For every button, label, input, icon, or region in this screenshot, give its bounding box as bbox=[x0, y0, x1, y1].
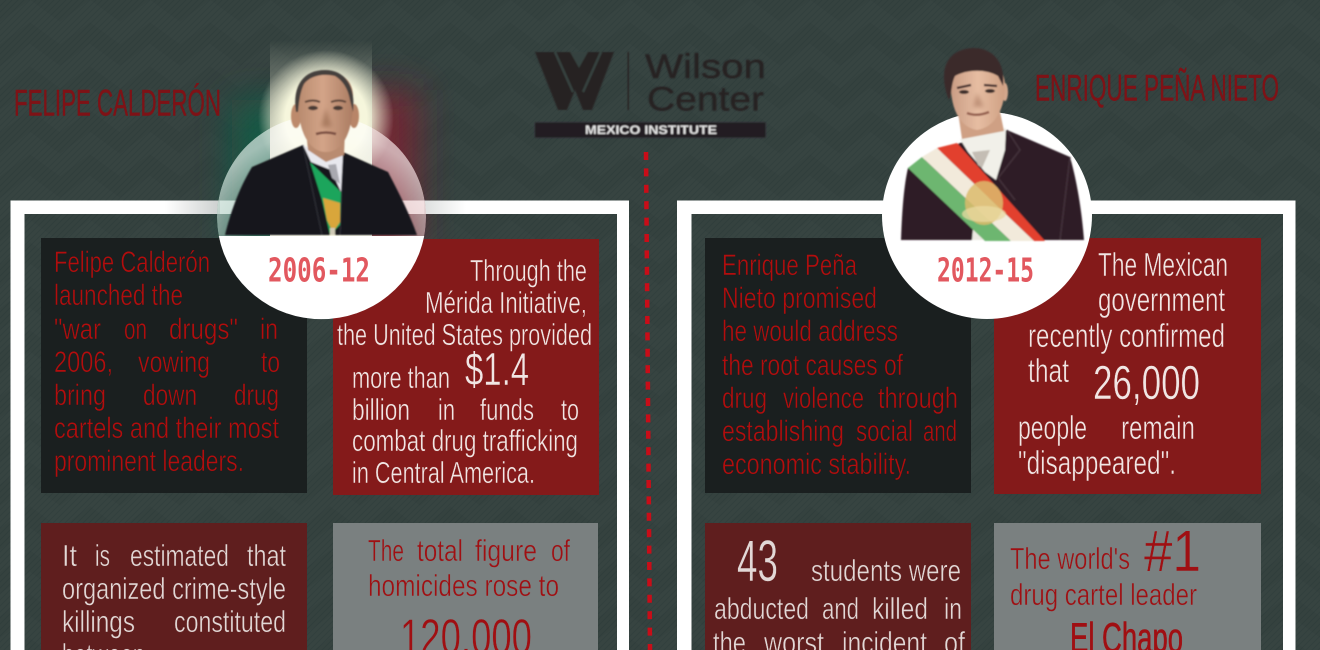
panel: Mérida Initiative: the United States provided bbox=[337, 317, 592, 352]
panel: Mérida Initiative: Through the bbox=[470, 253, 587, 288]
panel: organized crime killings bbox=[41, 523, 307, 650]
logo bar: Mexico Institute: MEXICO INSTITUTE bbox=[585, 123, 717, 137]
portrait: Felipe Calderón bbox=[225, 70, 417, 235]
panel: 43 students: killed bbox=[872, 591, 928, 626]
portrait: Enrique Peña Nieto bbox=[901, 48, 1084, 241]
panel: disappeared: "disappeared". bbox=[1018, 444, 1176, 481]
panel: Peña Nieto promise bbox=[705, 238, 971, 493]
panel: Mérida Initiative: more than bbox=[352, 360, 450, 395]
panel: 43 students: and bbox=[822, 591, 859, 626]
panel: Mérida Initiative: in bbox=[438, 392, 455, 427]
icon: Wilson Center W mark bbox=[535, 52, 614, 110]
panel: organized crime killings: constituted bbox=[174, 604, 286, 639]
panel: disappeared: recently confirmed bbox=[1028, 317, 1225, 354]
flag glow behind Calderón bbox=[232, 40, 418, 255]
panel: total homicides: homicides rose to bbox=[368, 568, 559, 603]
panel: Calderón launched war on drugs: launched the bbox=[54, 279, 183, 312]
panel: organized crime killings: It bbox=[62, 538, 77, 573]
panel: 43 students: abducted bbox=[714, 591, 809, 626]
panel: total homicides: figure bbox=[475, 533, 537, 568]
panel: disappeared: that bbox=[1028, 352, 1069, 389]
panel: Calderón launched war on drugs: on bbox=[124, 313, 147, 346]
panel: Calderón launched war on drugs: 2006, bbox=[54, 346, 113, 379]
panel: Calderón launched war on drugs: bring bbox=[54, 379, 106, 412]
panel: Calderón launched war on drugs: prominent leaders. bbox=[54, 445, 244, 478]
panel: total homicides: The bbox=[368, 533, 404, 568]
panel: Calderón frame bbox=[10, 200, 629, 650]
panel: Peña Nieto promise: and bbox=[923, 415, 957, 448]
panel: total homicides bbox=[333, 523, 598, 650]
panel: organized crime killings: estimated bbox=[130, 538, 229, 573]
panel: El Chapo: The world's bbox=[1010, 541, 1130, 576]
year: 2012-15: 2012-15 bbox=[937, 250, 1034, 290]
panel: Calderón launched war on drugs: to bbox=[261, 346, 280, 379]
panel: El Chapo: #1 bbox=[1144, 519, 1201, 584]
panel: Calderón launched war on drugs: Felipe Calderón bbox=[54, 246, 210, 279]
panel: Peña Nieto promise: economic stability. bbox=[722, 448, 911, 481]
panel: Mérida Initiative: in Central America. bbox=[352, 455, 535, 490]
panel: Mérida Initiative: funds bbox=[480, 392, 534, 427]
title: Felipe Calderón: FELIPE CALDERÓN bbox=[14, 82, 221, 124]
panel: Calderón launched war on drugs: vowing bbox=[138, 346, 210, 379]
panel: Mérida Initiative: billion bbox=[352, 392, 410, 427]
panel: El Chapo: drug cartel leader bbox=[1010, 577, 1197, 612]
panel: Mérida Initiative: to bbox=[561, 392, 579, 427]
panel: Peña Nieto promise: establishing bbox=[722, 415, 844, 448]
panel: Peña Nieto promise: violence bbox=[783, 382, 864, 415]
panel: Mérida Initiative: Mérida Initiative, bbox=[425, 285, 587, 320]
panel: Peña Nieto promise: he would address bbox=[722, 315, 898, 348]
panel: Mérida Initiative: combat drug trafficking bbox=[352, 423, 578, 458]
panel: Calderón launched war on drugs: drug bbox=[234, 379, 279, 412]
panel: disappeared bbox=[994, 238, 1261, 494]
panel: Peña Nieto promise: the root causes of bbox=[722, 349, 903, 382]
panel: 43 students: 43 bbox=[737, 529, 778, 594]
panel: organized crime killings: killings bbox=[62, 604, 135, 639]
logo name: Wilson: Wilson bbox=[645, 48, 766, 86]
panel: Calderón launched war on drugs: down bbox=[143, 379, 197, 412]
panel: Calderón launched war on drugs: cartels and their most bbox=[54, 412, 280, 445]
panel: 43 students: students were bbox=[811, 553, 961, 588]
panel: disappeared: 26,000 bbox=[1093, 357, 1200, 410]
panel: disappeared: people bbox=[1018, 409, 1087, 446]
panel: Peña Nieto frame bbox=[677, 200, 1296, 650]
panel: Calderón launched war on drugs: "war bbox=[54, 313, 101, 346]
divider: logo rule bbox=[628, 52, 629, 110]
panel: Peña Nieto promise: through bbox=[878, 382, 958, 415]
panel: Peña Nieto promise: drug bbox=[722, 382, 767, 415]
panel: Peña Nieto promise: Enrique Peña bbox=[722, 249, 857, 282]
panel: Mérida Initiative: $1.4 bbox=[465, 343, 529, 395]
logo name: Center: Center bbox=[647, 80, 764, 118]
logo bar: Mexico Institute bbox=[535, 122, 766, 138]
white lower half bbox=[219, 236, 424, 319]
panel: Mérida Initiative bbox=[333, 239, 599, 495]
badge: Peña Nieto circle with portrait bbox=[882, 48, 1092, 319]
panel: total homicides: of bbox=[551, 533, 570, 568]
panel: disappeared: The Mexican bbox=[1098, 246, 1228, 283]
panel: organized crime killings: is bbox=[95, 538, 110, 573]
panel: total homicides: total bbox=[417, 533, 463, 568]
year: 2006-12: 2006-12 bbox=[268, 250, 370, 290]
panel: 43 students: in bbox=[944, 591, 962, 626]
panel: Calderón launched war on drugs: in bbox=[260, 313, 278, 346]
red dashed divider bbox=[646, 152, 650, 650]
panel: 43 students bbox=[705, 523, 971, 650]
panel: disappeared: remain bbox=[1121, 409, 1195, 446]
panel: Peña Nieto promise: social bbox=[856, 415, 913, 448]
panel: organized crime killings: organized crime-style bbox=[62, 571, 286, 606]
panel: El Chapo bbox=[994, 519, 1261, 650]
panel: Calderón launched war on drugs bbox=[41, 238, 307, 493]
logo: Wilson Center Mexico Institute bbox=[535, 48, 766, 138]
badge: Calderón circle with portrait bbox=[217, 70, 427, 319]
panel: disappeared: government bbox=[1098, 281, 1225, 318]
panel: Calderón launched war on drugs: drugs" bbox=[169, 313, 238, 346]
panel: organized crime killings: that bbox=[247, 538, 286, 573]
panel: Peña Nieto promise: Nieto promised bbox=[722, 282, 877, 315]
